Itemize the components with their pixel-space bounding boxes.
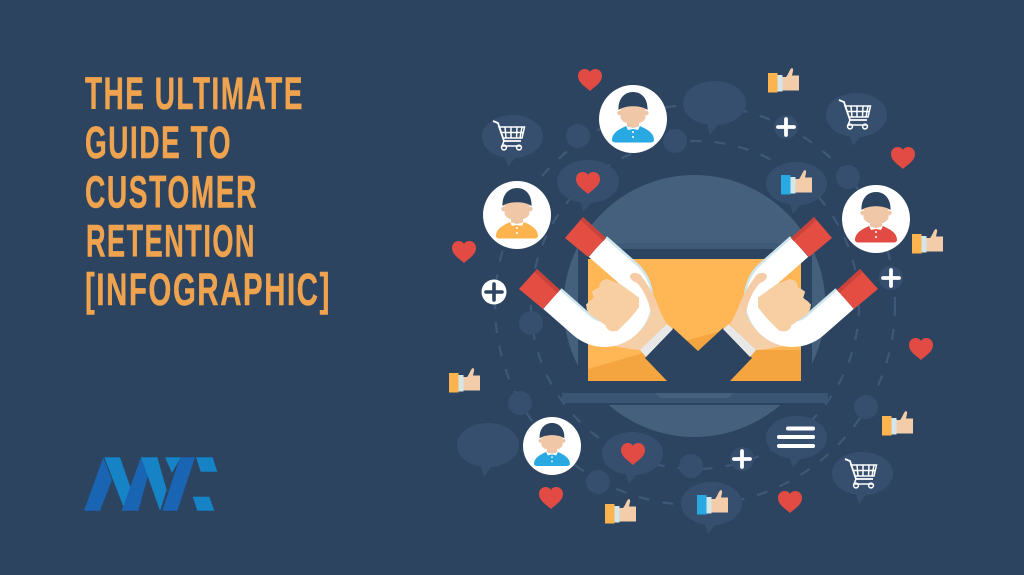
title: THE ULTIMATE — [85, 68, 304, 119]
right shirt cuff — [723, 324, 756, 357]
left shirt cuff — [640, 324, 673, 357]
central dome circle — [564, 175, 826, 437]
customer avatar: orange shirt — [483, 181, 551, 249]
menu lines icon — [779, 428, 813, 446]
suit sleeves — [645, 328, 752, 381]
customer avatar: blue shirt bottom — [523, 417, 581, 475]
speech bubbles — [457, 81, 893, 534]
left magnet — [519, 217, 641, 334]
plus badges — [482, 115, 903, 471]
customer avatar: blue shirt top — [599, 85, 667, 153]
envelope — [588, 259, 801, 381]
thumbs up icons — [449, 68, 943, 524]
dome shadow band — [578, 243, 812, 249]
right magnet — [756, 217, 878, 334]
shopping carts — [493, 100, 876, 488]
left hand wrist — [605, 285, 667, 350]
left fingers — [586, 273, 657, 332]
title: RETENTION — [86, 216, 256, 266]
small connector dots — [508, 124, 878, 494]
title: CUSTOMER — [85, 166, 258, 218]
laptop screen frame — [578, 249, 812, 405]
right fingers — [740, 273, 810, 332]
hearts — [452, 69, 933, 513]
right hand wrist — [730, 285, 792, 350]
laptop base bar — [562, 393, 828, 403]
title: [INFOGRAPHIC] — [85, 264, 331, 315]
title — [85, 68, 331, 315]
customer avatar: red shirt — [842, 185, 910, 253]
dashed orbit rings — [495, 105, 895, 505]
logo — [84, 457, 217, 511]
title: GUIDE TO — [85, 117, 232, 168]
